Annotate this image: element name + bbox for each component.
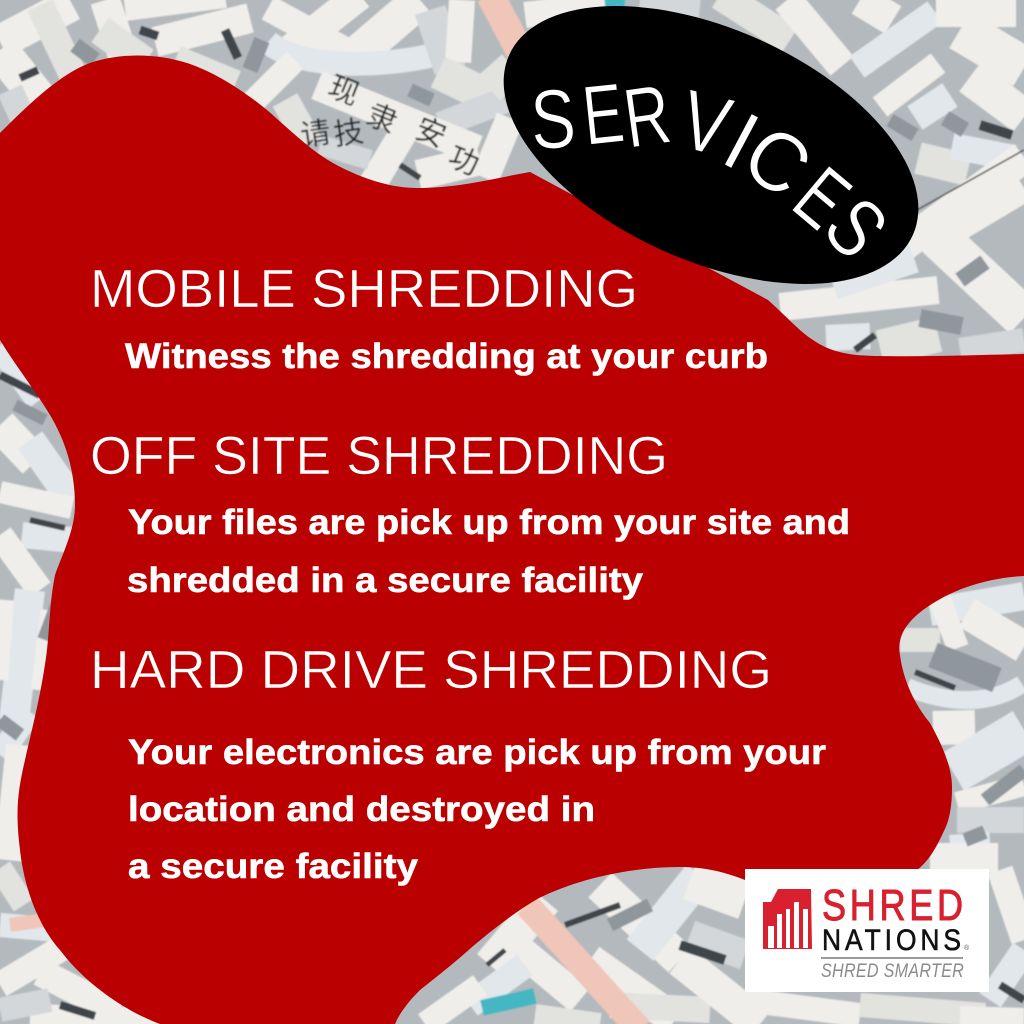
wordmark: NATIONS	[822, 922, 961, 956]
section: off site shredding: Your files are pick up from your site and	[128, 503, 850, 542]
title: SERVICES: I	[709, 94, 774, 188]
shredded paper characters: 请	[299, 116, 333, 153]
shredded paper characters: 隶	[361, 98, 402, 140]
logo: Shred Nations	[745, 869, 989, 992]
section: hard drive shredding: Your electronics are pick up from your	[128, 733, 826, 772]
wordmark: ®	[964, 944, 970, 952]
section: off site shredding: OFF SITE SHREDDING	[90, 426, 668, 486]
shredded paper characters	[299, 70, 484, 182]
section: hard drive shredding: location and destroyed in	[128, 790, 595, 829]
section: mobile shredding: MOBILE SHREDDING	[90, 259, 638, 319]
icon: shredded page	[763, 889, 812, 949]
shredded paper characters: 技	[332, 115, 366, 152]
title: SERVICES: R	[618, 66, 676, 166]
section: hard drive shredding: a secure facility	[128, 847, 419, 886]
section: off site shredding	[90, 426, 850, 600]
title: SERVICES: S	[528, 72, 578, 168]
wordmark	[821, 881, 970, 981]
section: hard drive shredding: HARD DRIVE SHREDDING	[90, 640, 772, 700]
black services ellipse	[462, 0, 960, 341]
wordmark: SHRED	[822, 881, 963, 930]
shredded paper characters: 功	[443, 140, 484, 182]
title: SERVICES: C	[726, 107, 828, 216]
section: off site shredding: shredded in a secure facility	[127, 561, 644, 600]
title: SERVICES: E	[578, 65, 628, 163]
section: mobile shredding	[90, 259, 768, 376]
title: SERVICES	[528, 65, 906, 276]
title: SERVICES: E	[776, 149, 868, 247]
shredded paper characters: 安	[410, 112, 451, 154]
section: hard drive shredding	[90, 640, 826, 886]
title: SERVICES: S	[806, 180, 906, 276]
shredded paper characters: 现	[323, 70, 364, 112]
title: SERVICES: V	[671, 71, 740, 175]
wordmark: SHRED SMARTER	[821, 960, 964, 981]
section: mobile shredding: Witness the shredding at your curb	[125, 337, 768, 376]
